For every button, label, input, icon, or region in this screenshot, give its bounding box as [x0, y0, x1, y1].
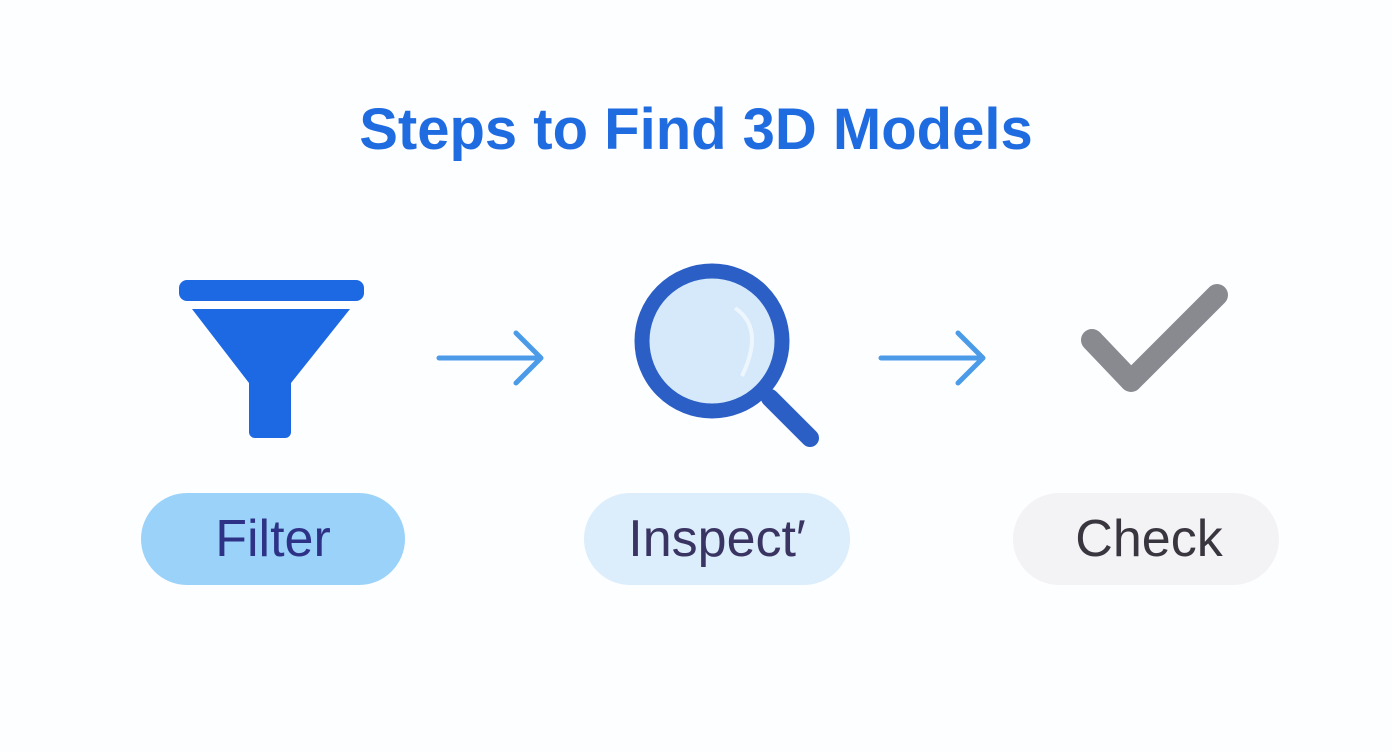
icon: funnel	[179, 280, 364, 438]
label: Check	[1013, 493, 1279, 585]
icon: checkmark	[1081, 284, 1228, 392]
label: Inspect: Inspect′	[628, 510, 806, 568]
arrow 1	[436, 330, 544, 386]
label: Inspect	[584, 493, 850, 585]
label: Filter: Filter	[215, 510, 331, 568]
title: Steps to Find 3D Models	[359, 97, 1033, 162]
label: Filter	[141, 493, 405, 585]
label: Check: Check	[1075, 510, 1223, 568]
icon: magnifier	[634, 264, 819, 447]
arrow 2	[878, 330, 986, 386]
